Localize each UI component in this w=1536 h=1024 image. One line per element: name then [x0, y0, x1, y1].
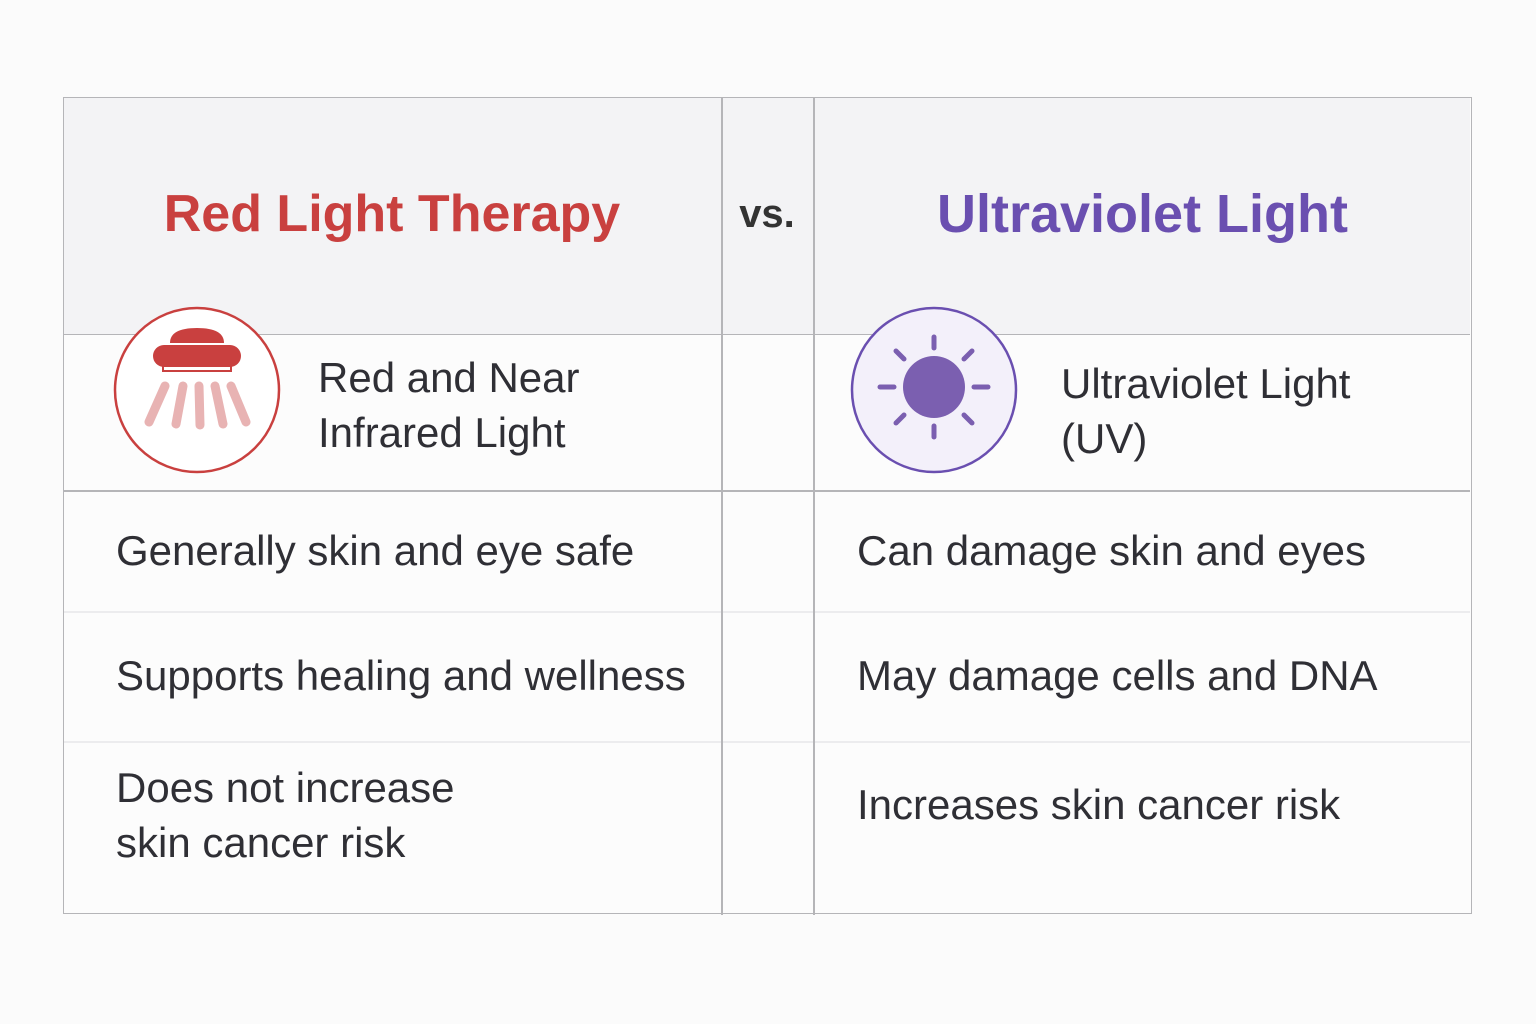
heading: Ultraviolet Light: Ultraviolet Light	[937, 184, 1348, 244]
row 3 left: skin cancer risk	[116, 819, 405, 866]
header band	[64, 98, 1470, 335]
row 1 right: Can damage skin and eyes	[857, 527, 1366, 574]
row 3 right: Increases skin cancer risk	[857, 781, 1340, 828]
heading: vs.: vs.	[739, 192, 795, 236]
icon: red light lamp	[114, 306, 280, 474]
icon: UV sun	[850, 306, 1018, 474]
row 2 left: Supports healing and wellness	[116, 652, 686, 699]
row 2 right: May damage cells and DNA	[857, 652, 1378, 699]
text: Ultraviolet Light (UV): (UV)	[1061, 415, 1147, 462]
table panel	[63, 97, 1472, 914]
row 3 left: Does not increase	[116, 764, 455, 811]
text: Ultraviolet Light (UV)	[1061, 360, 1350, 462]
text: Red and Near Infrared Light	[318, 354, 580, 456]
heading: Red Light Therapy: Red Light Therapy	[164, 185, 620, 243]
text: Red and Near Infrared Light: Red and Near	[318, 354, 580, 401]
row 1 left: Generally skin and eye safe	[116, 527, 634, 574]
text: Red and Near Infrared Light: Infrared Light	[318, 409, 566, 456]
text: Ultraviolet Light (UV): Ultraviolet Light	[1061, 360, 1350, 407]
row 3 left	[116, 764, 455, 866]
